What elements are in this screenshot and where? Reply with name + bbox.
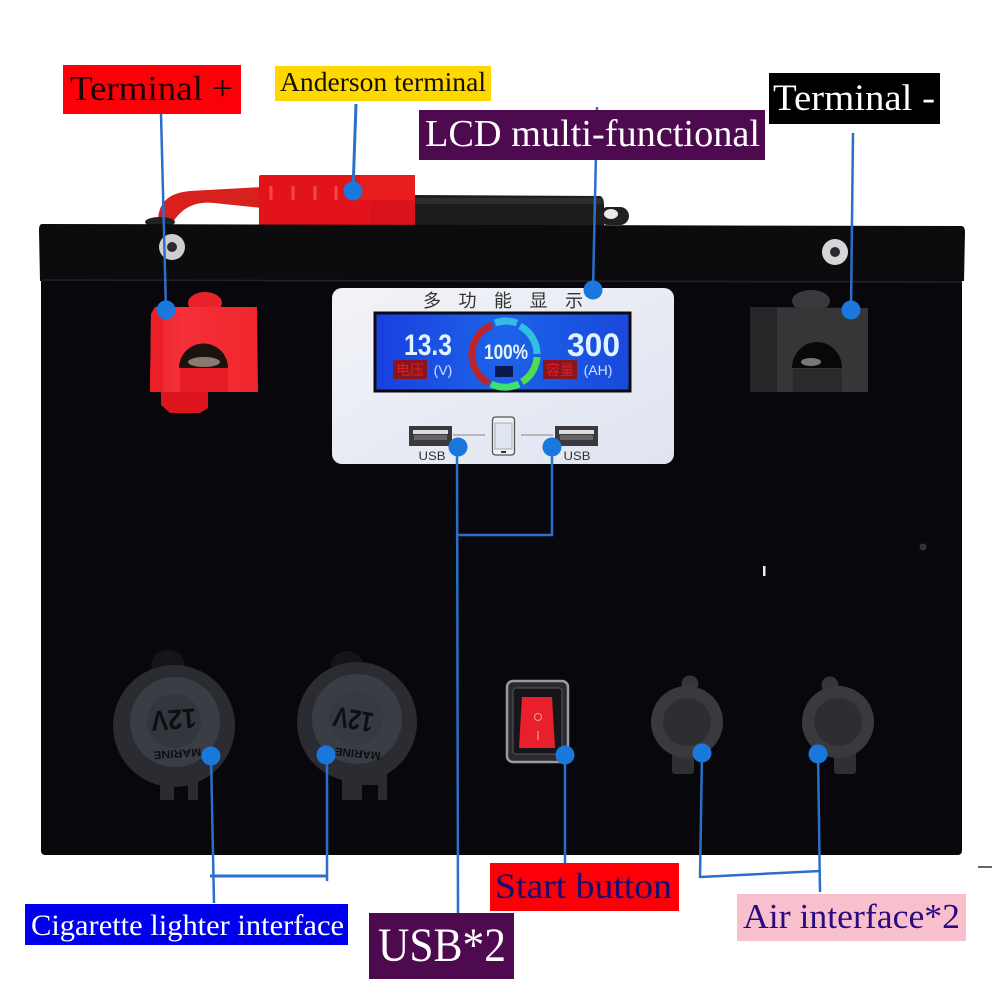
label: cigarette lighter interface: Cigarette lighter interface	[31, 909, 344, 942]
leader lines: cigarette	[202, 746, 336, 903]
voltage label	[393, 360, 452, 379]
case body	[41, 278, 962, 855]
battery indicator	[495, 366, 513, 377]
air interface left	[651, 676, 723, 774]
right usb port: USB	[564, 449, 590, 463]
air interface right	[802, 676, 874, 774]
leader lines: air	[692, 744, 828, 892]
cigarette lighter socket right	[297, 651, 417, 800]
label: start button: Start button	[495, 866, 672, 906]
left lid screw	[159, 234, 185, 260]
multi-function display panel	[332, 288, 674, 464]
leader line: terminal minus	[842, 133, 860, 320]
leader line: start button	[556, 746, 574, 863]
label: air interface: Air interface*2	[743, 897, 960, 936]
label: terminal minus: Terminal -	[773, 78, 935, 119]
label: usb: USB*2	[378, 919, 506, 972]
anderson connector and cable	[145, 175, 629, 227]
left usb port: USB	[418, 449, 446, 463]
capacity reading: 300	[567, 327, 620, 363]
battery ring	[472, 321, 537, 387]
percent reading: 100%	[484, 341, 528, 364]
leader lines: usb	[448, 438, 562, 913]
label: anderson terminal: Anderson terminal	[280, 67, 486, 97]
voltage label: (V)	[434, 362, 452, 378]
label: terminal plus	[63, 65, 241, 114]
right usb port	[555, 426, 598, 463]
battery case	[39, 224, 965, 855]
left usb port	[409, 426, 452, 463]
cigarette lighter socket right: MARINE	[334, 745, 381, 761]
specks	[763, 544, 992, 867]
label: lcd multi-functional: LCD multi-functional	[425, 113, 760, 155]
leader line: lcd	[584, 107, 602, 300]
leader line: anderson	[344, 104, 362, 200]
voltage reading: 13.3	[404, 329, 452, 362]
capacity label	[543, 360, 612, 379]
positive terminal cover	[150, 292, 258, 413]
case lid	[39, 224, 965, 281]
capacity label: (AH)	[584, 362, 612, 378]
right lid screw	[822, 239, 848, 265]
leader line: terminal plus	[156, 114, 176, 320]
cigarette lighter socket left: 12V	[150, 702, 197, 737]
voltage label: 电压	[396, 362, 424, 378]
negative terminal cover	[750, 290, 868, 392]
lcd screen	[375, 313, 630, 391]
cigarette lighter socket right: 12V	[331, 701, 376, 738]
panel heading: 多 功 能 显 示	[423, 291, 583, 311]
capacity label: 容量	[546, 362, 574, 378]
start switch	[507, 681, 568, 762]
cigarette lighter socket left: MARINE	[153, 745, 202, 761]
cigarette lighter socket left	[113, 650, 235, 800]
label: terminal plus: Terminal +	[70, 69, 233, 108]
phone icon	[453, 417, 553, 455]
